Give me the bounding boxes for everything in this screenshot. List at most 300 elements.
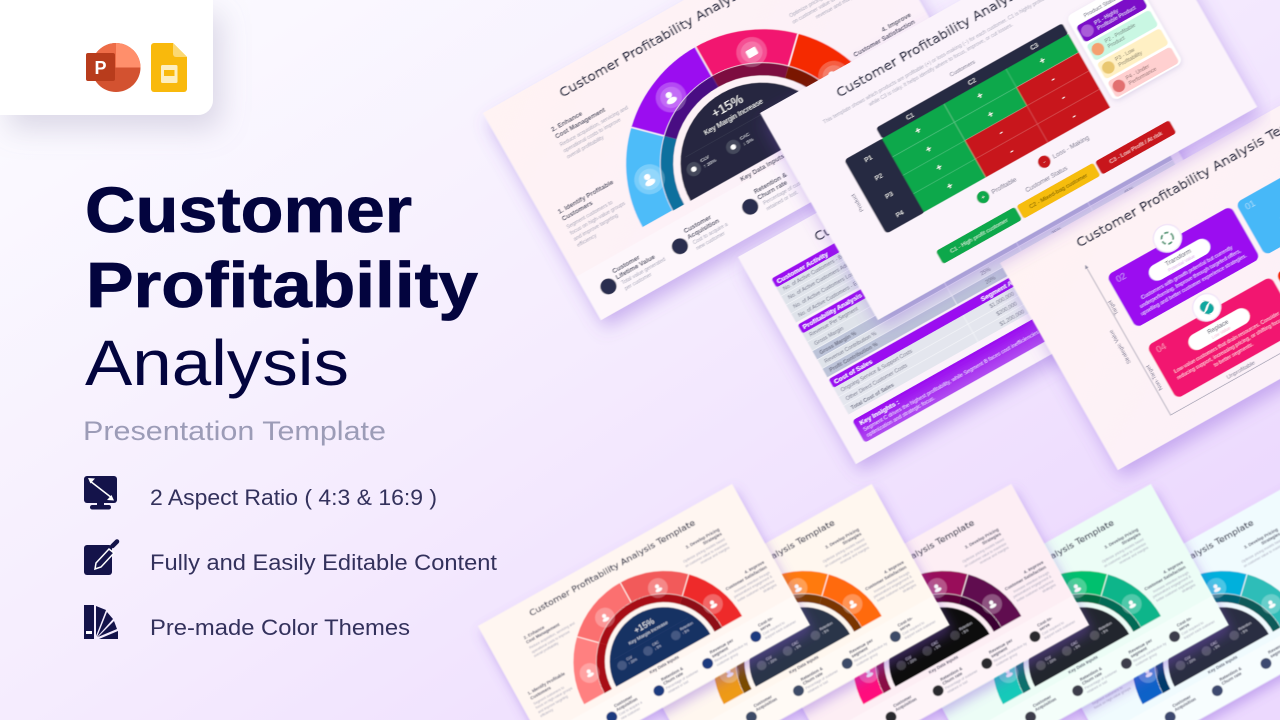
segment icons	[599, 2, 854, 200]
text blocks: Reduce acquisition, servicing and	[559, 105, 629, 148]
key data inputs	[586, 146, 817, 302]
section: customer activity: No. of Active Customers - Beginning	[782, 245, 861, 292]
quadrant 02: transform: upselling and better customer experience strategies.	[1140, 253, 1248, 317]
matrix grid: -	[1060, 92, 1067, 103]
text blocks: Key Data Inputs	[1067, 654, 1099, 675]
text blocks: Optimize pricing models based	[962, 537, 1005, 564]
text blocks: overall profitability	[566, 135, 606, 161]
KPIs: ↓ 5%	[1212, 644, 1221, 651]
subtitle: Presentation Template	[83, 416, 386, 446]
KPIs: Retention	[1238, 621, 1252, 632]
table title: Customer Profitability Analysis Template	[812, 93, 1065, 244]
text blocks: Segment customers to	[566, 200, 614, 231]
profit legend: -	[1042, 159, 1047, 165]
key insights box: optimization and strategic focus.	[866, 396, 936, 439]
product status card: Profitability	[1117, 50, 1144, 69]
text blocks: Key Data Inputs	[1207, 654, 1239, 675]
feature: editable: Fully and Easily Editable Content	[150, 550, 497, 575]
text blocks: Customers	[1088, 685, 1111, 701]
matrix grid	[838, 23, 1110, 234]
text blocks: better customer experience	[870, 40, 928, 76]
text blocks: Percentage of customer	[805, 669, 839, 690]
customer status pills: C3 - Low Profit / At risk	[1109, 131, 1164, 166]
matrix grid: -	[1049, 74, 1057, 84]
text blocks: Revenue per	[988, 638, 1013, 655]
slide: magenta theme: Customer Profitability Analysis Template	[806, 517, 976, 618]
key data inputs: Customer	[613, 694, 633, 708]
text blocks: Customer	[1171, 694, 1192, 708]
KPIs: Retention	[679, 621, 694, 632]
text blocks: 3. Develop Pricing	[964, 527, 999, 550]
text blocks: Retention &	[800, 666, 824, 682]
key data inputs: segment	[711, 646, 730, 659]
text blocks: strategies	[763, 583, 778, 594]
matrix grid: -	[1008, 146, 1015, 156]
KPIs: ↑ 20%	[907, 658, 917, 666]
text blocks: on customer value to maximize	[1103, 542, 1147, 568]
central KPI semicircle: Key Margin Increase	[703, 98, 764, 137]
text blocks: strategies	[1181, 583, 1197, 594]
KPIs: CLV	[905, 655, 912, 662]
KPIs: Key Margin Increase	[767, 620, 809, 647]
text blocks: 4. Improve	[1162, 560, 1184, 575]
feature: colour themes: Pre-made Color Themes	[150, 615, 410, 640]
text blocks: personalized engagement &	[865, 33, 925, 70]
text blocks: Strategies	[981, 531, 1003, 546]
KPIs: Key Margin Increase	[1186, 620, 1228, 647]
matrix grid: -	[1070, 111, 1078, 121]
matrix grid: P4	[895, 209, 906, 219]
text blocks: Customer	[753, 694, 773, 708]
section: profitability analysis: 45%	[1123, 186, 1136, 196]
axis labels	[822, 59, 1012, 213]
text blocks: support each customer	[1043, 619, 1077, 640]
axes: Unprofitable	[1226, 360, 1257, 381]
section: cost of sales: Other Direct Customer Costs	[845, 363, 909, 402]
text blocks: Optimize pricing models based	[1101, 537, 1145, 564]
text blocks: Acquisition	[1174, 696, 1197, 712]
text blocks: Strategies	[842, 531, 863, 546]
feature: colour themes	[84, 605, 410, 640]
profit legend: +	[981, 194, 986, 201]
text blocks: support each customer	[904, 619, 937, 640]
key insights box: Segment C drives the highest profitability, while Segment B faces cost inefficiencies and limited returns, requiring	[863, 295, 1102, 433]
central KPI semicircle: CLV	[700, 155, 710, 164]
text blocks: Customers	[529, 685, 552, 701]
slide: semicircle diagram (top)	[483, 0, 980, 320]
slide: orange theme	[618, 484, 950, 720]
text blocks: retained or lost	[807, 680, 829, 694]
text blocks: 1. Identify Profitable	[527, 671, 566, 696]
text blocks: focus on high-value groups	[569, 201, 627, 237]
text blocks: Cost-to-	[1036, 615, 1053, 628]
key data inputs: Key Data Inputs	[739, 153, 786, 183]
KPIs: Key Margin Increase	[627, 620, 669, 647]
text blocks: on customer value to maximize	[684, 542, 728, 568]
text blocks: Customer Satisfaction	[1004, 564, 1047, 591]
text blocks: better customer experience	[876, 579, 915, 603]
text blocks: personalized engagement &	[1152, 574, 1192, 599]
quadrant 01	[1235, 133, 1280, 256]
text blocks: focus on high-value groups	[535, 686, 574, 710]
KPIs: +15%	[911, 616, 936, 635]
text blocks: Revenue contribution by	[853, 641, 888, 663]
KPIs: CAC	[931, 640, 939, 647]
customer status pills: C1 - High profit customer	[950, 218, 1009, 255]
key data inputs: Cost-to-	[757, 615, 774, 628]
slide: product customer matrix	[760, 0, 1257, 320]
text blocks	[1061, 526, 1280, 720]
KPIs	[743, 600, 836, 672]
key data inputs: serve	[759, 622, 772, 632]
KPIs: ↑ 20%	[1186, 658, 1196, 666]
key data inputs: Churn rate	[662, 671, 685, 686]
product status card: P2 - Profitable	[1104, 23, 1137, 45]
feature: aspect ratio: 2 Aspect Ratio ( 4:3 & 16:9 )	[150, 485, 437, 510]
key data inputs: Customer	[683, 214, 713, 235]
slide: financial table	[738, 44, 1235, 464]
table rows	[776, 88, 1204, 414]
text blocks: Churn rate	[1221, 671, 1243, 686]
text blocks: Customer Satisfaction	[864, 564, 908, 591]
key data inputs: Customer	[611, 254, 641, 275]
quadrant 02: transform: underperforming. Improve through targeted offers,	[1139, 248, 1242, 310]
text blocks: Increase retention through	[865, 27, 921, 62]
central KPI semicircle: Retention	[782, 103, 803, 118]
section: profitability analysis: 25%	[980, 267, 992, 277]
key data inputs: Key Data Inputs	[649, 654, 681, 675]
text blocks: Segment customers to	[1091, 685, 1123, 706]
text blocks: customer group	[856, 652, 879, 667]
key data inputs: new customer	[695, 231, 727, 252]
KPIs	[883, 600, 976, 672]
quadrant 03	[1276, 204, 1280, 327]
slide: quadrant matrix	[1000, 50, 1280, 470]
text blocks: customer group	[995, 652, 1018, 667]
slide: blue theme	[1036, 484, 1280, 720]
text blocks: Cost-to-	[896, 615, 914, 628]
section: customer activity: No. of Active Customers Added	[787, 259, 856, 301]
main heading: Analysis	[85, 327, 349, 399]
key data inputs: Lifetime Value	[615, 253, 657, 281]
text blocks: Increase retention through	[1152, 570, 1189, 594]
ring	[680, 538, 882, 705]
KPIs: Retention	[959, 621, 973, 632]
text blocks: customer group	[1135, 652, 1158, 667]
text blocks: 4. Improve	[881, 12, 913, 34]
axes: Non-Target	[1145, 363, 1164, 391]
product status card: P3 - Low	[1114, 48, 1136, 63]
text blocks	[691, 515, 938, 720]
KPIs: Retention	[819, 621, 833, 632]
KPIs: ↑ 5%	[1240, 629, 1248, 636]
KPIs: ↑ 5%	[682, 629, 690, 636]
key data inputs: customer group	[716, 652, 739, 667]
ring	[541, 538, 743, 705]
text blocks: Increase retention through	[733, 570, 771, 594]
key data inputs: Percentage of customer	[762, 174, 813, 207]
text blocks: Churn rate	[1081, 671, 1103, 686]
section: cost of sales: $1,000,000	[989, 291, 1016, 310]
matrix grid: +	[975, 90, 985, 101]
KPIs: CLV	[1184, 655, 1191, 662]
key data inputs: Total value generated	[621, 257, 667, 286]
KPIs: ↓ 5%	[654, 644, 662, 651]
section: cost of sales: Cost of Sales	[833, 359, 874, 386]
text blocks: Retention &	[939, 666, 963, 682]
quadrant 02: transform: 02	[1114, 271, 1128, 284]
key data inputs	[596, 596, 798, 720]
matrix grid: P2	[874, 172, 885, 182]
central KPI semicircle: ↓ 5%	[742, 137, 755, 148]
text blocks: 3. Develop Pricing	[685, 527, 720, 550]
text blocks: Acquisition	[1034, 696, 1058, 712]
customer status pills	[930, 110, 1176, 264]
main heading: Profitability	[86, 249, 478, 321]
text blocks: Cost-to-	[1176, 615, 1193, 628]
KPIs: CAC	[1210, 640, 1218, 647]
KPIs: ↑ 5%	[821, 629, 830, 636]
profit legend: Loss - Making	[1052, 134, 1091, 160]
product status card: P4 - Under	[1125, 64, 1151, 82]
text blocks: 4. Improve	[744, 560, 765, 575]
key data inputs: Retention &	[660, 666, 684, 682]
KPIs: ↓ 5%	[793, 644, 802, 651]
key data inputs: Cost required to	[762, 621, 785, 636]
axis labels: Product	[851, 192, 866, 213]
matrix grid: P1	[864, 154, 874, 164]
KPIs: CAC	[652, 640, 660, 647]
text blocks: Churn rate	[802, 671, 824, 686]
text blocks: 3. Develop Pricing	[1243, 527, 1279, 550]
text blocks: Increase retention through	[873, 570, 910, 594]
section: customer activity: No. of Active Customers - End	[797, 278, 864, 319]
text blocks: better customer experience	[737, 579, 775, 603]
ring	[820, 538, 1022, 705]
key data inputs: support each customer	[764, 619, 798, 640]
key data inputs: Retention &	[753, 171, 788, 195]
matrix grid: +	[945, 180, 954, 191]
product status card	[1066, 0, 1183, 101]
icon: colour fan	[84, 605, 118, 639]
product status card: P1 - Highly	[1093, 8, 1120, 26]
text blocks: Customer	[1032, 694, 1052, 708]
text blocks: Key Data Inputs	[788, 654, 820, 675]
text blocks: Churn rate	[942, 671, 964, 686]
text blocks	[831, 515, 1077, 720]
text blocks: revenue and margins	[700, 546, 731, 565]
axis labels: Customers	[949, 59, 977, 78]
KPIs: CAC	[1070, 640, 1079, 647]
text blocks: 3. Develop Pricing	[1103, 527, 1139, 550]
text blocks: and improve targeting	[537, 694, 569, 714]
KPIs: ↓ 5%	[933, 644, 941, 651]
key data inputs: Cost to acquire a	[692, 222, 729, 246]
slide: magenta theme	[757, 484, 1089, 720]
text blocks: Optimize pricing models based	[682, 537, 726, 564]
section: cost of sales: $1,200,000	[999, 309, 1026, 328]
text blocks: Cost required to	[1041, 621, 1065, 636]
quadrant 04: replace: Replace	[1206, 319, 1230, 336]
text blocks: segment	[990, 646, 1009, 659]
text blocks	[502, 515, 778, 718]
text blocks: Acquisition	[894, 696, 918, 712]
axes	[1074, 112, 1280, 421]
icon: edit	[84, 542, 117, 575]
KPIs: Retention	[1098, 621, 1113, 632]
text blocks: personalized engagement &	[873, 574, 913, 599]
section: cost of sales: Total Cost of Sales	[850, 382, 895, 411]
section: profitability analysis: 30%	[1056, 235, 1069, 246]
section: cost of sales: $200,000	[996, 301, 1019, 318]
quadrant 04: replace	[1138, 261, 1280, 399]
text blocks: Segment customers to	[533, 685, 565, 706]
KPIs: +15%	[1051, 616, 1075, 635]
matrix grid: C1	[905, 112, 916, 122]
main heading: Customer	[85, 174, 412, 246]
matrix grid: C3	[1029, 42, 1040, 52]
KPIs	[1023, 600, 1115, 672]
text blocks: Percentage of customer	[1084, 669, 1118, 690]
section: customer activity: No. of Active Customers Lost (-)	[792, 267, 863, 310]
section: profitability analysis: Gross Margin	[814, 326, 845, 347]
main heading	[85, 174, 478, 399]
KPIs: ↑ 20%	[628, 658, 638, 666]
feature: editable	[84, 542, 497, 575]
section: customer activity: Customer Activity	[776, 251, 830, 285]
ring	[959, 538, 1162, 705]
text blocks: Revenue contribution by	[1133, 641, 1167, 663]
text blocks: Cost Management	[525, 622, 561, 645]
text blocks: on customer value to maximize	[964, 542, 1007, 568]
slide title: Customer Profitability Analysis Template	[527, 517, 697, 618]
matrix grid: +	[924, 143, 933, 155]
KPIs: ↑ 5%	[961, 629, 969, 636]
text blocks: Retention &	[1079, 666, 1103, 682]
text blocks: serve	[1178, 622, 1191, 632]
quadrant 01: 01	[1243, 198, 1257, 212]
key data inputs: retained or lost.	[766, 190, 800, 212]
KPIs: CAC	[791, 640, 799, 647]
slide: red theme	[478, 484, 810, 720]
KPIs: ↑ 20%	[768, 658, 778, 666]
text blocks: Cost required to	[1181, 621, 1204, 636]
text blocks: Customer	[892, 694, 912, 708]
KPIs: ↓ 5%	[1073, 644, 1081, 651]
quadrant 02: transform: Potential Value	[1167, 253, 1196, 273]
quadrant 02: transform: Customers with growth potential but currently	[1140, 245, 1234, 301]
matrix grid: +	[1038, 55, 1047, 66]
section: profitability analysis: 50%	[1128, 195, 1141, 205]
KPIs: +15%	[772, 616, 796, 635]
key data inputs: Cost to acquire a	[618, 700, 643, 717]
quadrant 02: transform: Transform	[1164, 248, 1193, 268]
text blocks: operational costs to improve	[531, 630, 571, 654]
key data inputs: Churn rate	[756, 179, 789, 202]
feature: aspect ratio	[84, 476, 437, 510]
section: profitability analysis: 20%	[985, 275, 997, 286]
quadrant 04: replace: Low-value customers that drain resources. Consider	[1173, 311, 1280, 375]
text blocks: Revenue per	[1127, 638, 1153, 655]
icon: monitor	[84, 476, 117, 510]
text blocks: Acquisition	[755, 696, 778, 712]
text blocks: strategies	[1042, 583, 1057, 594]
central KPI semicircle: CAC	[739, 132, 751, 142]
axes: Target	[1107, 299, 1120, 316]
quadrant 04: replace: Low Value	[1211, 325, 1232, 340]
text blocks: efficiency	[540, 708, 554, 718]
text blocks: 4. Improve	[1023, 560, 1044, 575]
text blocks: Customer Satisfaction	[1143, 564, 1187, 591]
text blocks: overall profitability	[533, 641, 560, 658]
profit legend: Profitable	[990, 176, 1018, 196]
text blocks: 1. Identify Profitable	[557, 179, 615, 216]
KPIs: ↑ 20%	[1047, 658, 1057, 666]
matrix grid: +	[934, 162, 944, 173]
key data inputs: Revenue contribution by	[714, 641, 748, 663]
text blocks: Optimize pricing models based	[822, 537, 865, 564]
text blocks: and improve targeting	[573, 213, 620, 243]
KPIs: ↑ 5%	[1100, 629, 1109, 636]
section: profitability analysis: Revenue Per Segment	[809, 306, 860, 338]
text blocks: Revenue contribution by	[993, 641, 1028, 663]
text blocks: personalized engagement &	[733, 574, 774, 599]
key data inputs: Acquisition	[615, 696, 639, 712]
matrix grid: +	[986, 109, 995, 120]
text blocks: serve	[1038, 622, 1051, 632]
section: profitability analysis: Revenue Contribution %	[824, 331, 878, 365]
ring	[1099, 538, 1280, 705]
section: profitability analysis: Profitability Analysis	[802, 292, 864, 331]
icon: PowerPoint: P	[94, 58, 107, 78]
text blocks: personalized engagement &	[1013, 574, 1053, 599]
text blocks	[970, 515, 1217, 720]
text blocks: Customer Satisfaction	[853, 19, 917, 59]
KPIs: Key Margin Increase	[1046, 620, 1088, 647]
text blocks: segment	[1130, 646, 1148, 659]
KPIs: CLV	[1045, 655, 1052, 662]
quadrant 04: replace: to better segments.	[1213, 342, 1255, 369]
section: cost of sales: Segment A	[980, 280, 1014, 303]
central KPI semicircle: +15%	[709, 91, 746, 121]
text blocks: 3. Develop Pricing	[824, 527, 860, 550]
text blocks: focus on high-value groups	[1093, 686, 1132, 710]
matrix grid: -	[997, 128, 1005, 138]
text blocks: Retention &	[1218, 666, 1242, 682]
text blocks: Cost required to	[902, 621, 925, 636]
text blocks: revenue and margins	[1119, 546, 1149, 565]
key insights box	[852, 221, 1220, 443]
KPIs: CLV	[626, 655, 633, 662]
slide: green theme	[897, 484, 1229, 720]
key data inputs: Revenue per	[709, 638, 734, 655]
text blocks: revenue and margins	[979, 546, 1010, 565]
quadrant 04: replace: 04	[1154, 341, 1168, 355]
text blocks: 4. Improve	[883, 560, 905, 575]
slide: orange theme: Customer Profitability Analysis Template	[667, 517, 836, 618]
product status card: Product	[1107, 36, 1127, 50]
slide: green theme: Customer Profitability Analysis Template	[946, 517, 1115, 618]
text blocks: support each customer	[1183, 619, 1216, 640]
logo card	[0, 0, 213, 115]
section: profitability analysis: Gross Margin %	[819, 331, 858, 356]
central KPI semicircle: ↑ 20%	[703, 158, 718, 170]
text blocks: serve	[899, 622, 912, 632]
text blocks: Strategies	[702, 531, 723, 546]
key insights box: Key Insights :	[859, 399, 901, 427]
text blocks: operational costs to improve	[563, 117, 622, 154]
text blocks: better customer experience	[1156, 579, 1194, 603]
